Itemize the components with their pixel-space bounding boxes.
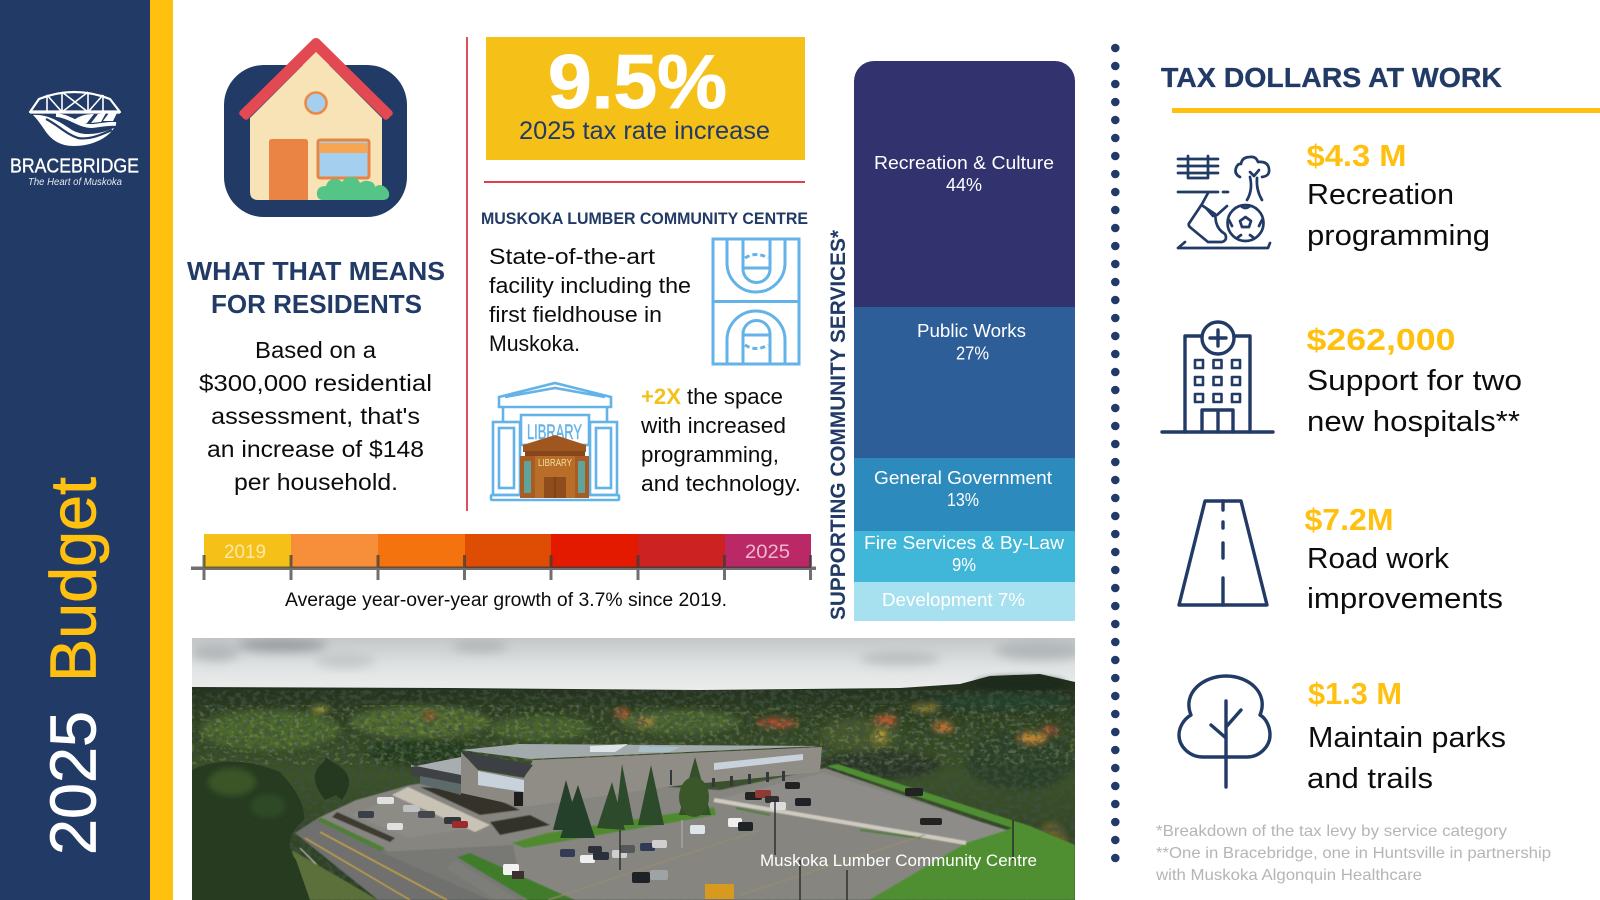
text block: +2X the space: with increased: [640, 413, 786, 438]
sky: [191, 638, 1085, 693]
stacked bar: supporting community services: [827, 61, 1075, 621]
item: recreation programming: [1178, 138, 1490, 252]
description: [1307, 365, 1522, 438]
axis and ticks: [191, 555, 816, 580]
text block: fieldhouse: Muskoka.: [489, 331, 580, 356]
icon: road: [1179, 501, 1267, 605]
amount: $1.3 M: $1.3 M: [1308, 676, 1402, 711]
item: support for two new hospitals: [1162, 322, 1522, 438]
trees: [192, 757, 711, 900]
left sidebar: [0, 0, 173, 900]
text block: residential assessment: [199, 337, 432, 495]
caption: average growth: Average year-over-year growth of 3.7% since 2019.: [285, 590, 727, 611]
segment: fire services: Fire Services & By-Law: [864, 533, 1065, 553]
text block: fieldhouse: [489, 244, 691, 356]
icon: bench, soccer ball and tree: [1178, 156, 1270, 248]
text block: fieldhouse: State-of-the-art: [489, 244, 655, 269]
description: [1307, 543, 1503, 615]
callout: 9.5% tax rate increase: [486, 37, 805, 160]
description: programming: [1307, 220, 1490, 252]
segment: fire services: [864, 533, 1065, 575]
heading: what that means: WHAT THAT MEANS: [187, 256, 445, 286]
amount: $7.2M: $7.2M: [1304, 502, 1394, 537]
text block: +2X the space: programming,: [641, 442, 779, 467]
description: new hospitals**: [1307, 406, 1520, 438]
description: Support for two: [1307, 365, 1522, 397]
label: 2025: 2025: [745, 542, 790, 563]
segment: general government: General Government: [874, 468, 1052, 488]
cars and details: [358, 782, 1013, 900]
segment: recreation and culture: Recreation & Culture: [874, 153, 1054, 173]
text block: residential assessment: Based on a: [255, 337, 377, 363]
text block: +2X the space: [640, 384, 801, 496]
heading: community centre: MUSKOKA LUMBER COMMUNITY CENTRE: [481, 210, 808, 228]
bar segments: [854, 61, 1075, 621]
timeline chart: growth since 2019: [191, 534, 816, 611]
footnotes: with Muskoka Algonquin Healthcare: [1155, 867, 1422, 884]
logo: Bracebridge: [10, 92, 139, 188]
big number: 9.5%: [548, 40, 727, 125]
building: [411, 744, 822, 807]
panel: what that means for residents: [187, 38, 445, 495]
icon: basketball court: [713, 239, 799, 364]
icon: hospital: [1162, 322, 1273, 432]
timeline bars: [204, 534, 811, 568]
icon: library: [491, 383, 619, 500]
icon: library: LIBRARY: [527, 421, 582, 444]
icon: house: [224, 38, 407, 217]
segment: recreation and culture: [874, 153, 1054, 195]
label: 2019: 2019: [224, 542, 266, 563]
segment: fire services: 9%: [952, 555, 976, 575]
amount: $4.3 M: $4.3 M: [1306, 138, 1406, 173]
item: road work improvements: [1179, 501, 1503, 615]
description: and trails: [1307, 763, 1433, 795]
segment: general government: 13%: [947, 490, 979, 510]
description: Road work: [1307, 543, 1450, 575]
text block: +2X the space: the space: [687, 384, 783, 409]
heading: what that means: [187, 256, 445, 319]
item: maintain parks and trails: [1179, 676, 1506, 795]
forest: [192, 674, 1075, 900]
logo tagline: The Heart of Muskoka: [28, 176, 122, 188]
text block: residential assessment: per household.: [234, 469, 398, 495]
icon: library: LIBRARY: [538, 458, 572, 469]
heading: what that means: FOR RESIDENTS: [211, 289, 422, 319]
vertical label: SUPPORTING COMMUNITY SERVICES*: [827, 229, 850, 620]
footnotes: *Breakdown of the tax levy by service category: [1156, 823, 1507, 840]
segment: general government: [874, 468, 1052, 510]
amount: $262,000: $262,000: [1306, 322, 1456, 357]
callout caption: 2025 tax rate increase: [519, 117, 770, 145]
footnotes: **One in Bracebridge, one in Huntsville in partnership: [1156, 845, 1551, 862]
segment: public works: Public Works: [917, 321, 1026, 341]
text block: +2X the space: +2X: [641, 384, 681, 409]
description: improvements: [1307, 583, 1503, 615]
description: Recreation: [1307, 179, 1454, 211]
description: Maintain parks: [1308, 722, 1506, 754]
title: Budget: Budget: [36, 477, 110, 682]
text block: fieldhouse: facility including the: [489, 273, 691, 298]
photo caption: Muskoka Lumber Community Centre: [760, 852, 1037, 870]
description: [1307, 722, 1506, 795]
icon: tree: [1179, 676, 1270, 787]
text block: residential assessment: assessment, that's: [211, 403, 420, 429]
panel: Muskoka Lumber Community Centre: [481, 210, 808, 500]
text block: fieldhouse: first fieldhouse in: [489, 302, 662, 327]
logo wordmark: BRACEBRIDGE: [10, 156, 139, 178]
segment: recreation and culture: 44%: [946, 175, 982, 195]
text block: residential assessment: $300,000 residential: [199, 370, 432, 396]
text block: +2X the space: and technology.: [641, 471, 801, 496]
ground: [292, 764, 1075, 900]
photo: Muskoka Lumber Community Centre aerial: [191, 638, 1085, 900]
title: 2025: 2025: [36, 711, 110, 855]
heading: tax dollars at work: TAX DOLLARS AT WORK: [1161, 62, 1502, 93]
footnotes: [1155, 823, 1551, 884]
description: [1307, 179, 1490, 252]
text block: residential assessment: an increase of $148: [207, 436, 424, 462]
segment: public works: 27%: [956, 344, 989, 364]
icon: bridge and river: [30, 92, 120, 146]
panel: tax dollars at work: [1155, 62, 1600, 884]
segment: development: Development 7%: [882, 590, 1025, 610]
segment: public works: [917, 321, 1026, 364]
